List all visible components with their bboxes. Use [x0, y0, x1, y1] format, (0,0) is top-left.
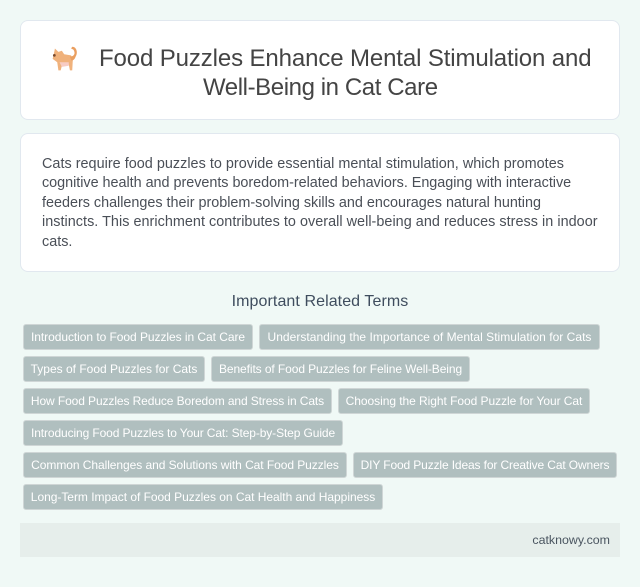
chip: Introduction to Food Puzzles in Cat Care — [31, 330, 245, 344]
chip: Benefits of Food Puzzles for Feline Well-Being — [219, 362, 462, 376]
chip: Common Challenges and Solutions with Cat Food Puzzles — [31, 458, 339, 472]
description text: Cats require food puzzles to provide essential mental stimulation, which promotes — [42, 156, 564, 172]
title line 2: Well-Being in Cat Care — [203, 74, 438, 101]
description text: feeders challenges their problem-solving skills and encourages natural hunting — [42, 195, 541, 211]
chip: Types of Food Puzzles for Cats — [31, 362, 197, 376]
chip: Choosing the Right Food Puzzle for Your Cat — [346, 394, 582, 408]
chip — [23, 356, 205, 382]
chip — [353, 452, 617, 478]
title line 1: Food Puzzles Enhance Mental Stimulation and — [99, 45, 591, 72]
chip — [23, 324, 253, 350]
description text: cats. — [42, 234, 72, 250]
heading: important related terms: Important Related Terms — [232, 293, 408, 310]
description text: cognitive health and prevents boredom-related behaviors. Engaging with interactive — [42, 175, 571, 191]
chip — [23, 484, 383, 510]
chip — [259, 324, 600, 350]
chip: Long-Term Impact of Food Puzzles on Cat Health and Happiness — [31, 490, 375, 504]
panel: title card — [20, 20, 620, 120]
icon: cat — [52, 46, 77, 70]
chip — [23, 420, 343, 446]
description text: instincts. This enrichment contributes to overall well-being and reduces stress in indoor — [42, 214, 598, 230]
description text — [42, 156, 598, 250]
chip list — [23, 324, 617, 510]
panel: description card — [20, 133, 620, 272]
chip: How Food Puzzles Reduce Boredom and Stress in Cats — [31, 394, 324, 408]
chip — [23, 452, 347, 478]
chip: DIY Food Puzzle Ideas for Creative Cat Owners — [361, 458, 609, 472]
chip: Understanding the Importance of Mental Stimulation for Cats — [268, 330, 591, 344]
chip — [338, 388, 590, 414]
footer bar — [20, 523, 620, 557]
chip — [211, 356, 470, 382]
footer source: catknowy.com — [532, 533, 610, 547]
chip — [23, 388, 332, 414]
chip: Introducing Food Puzzles to Your Cat: Step-by-Step Guide — [31, 426, 335, 440]
